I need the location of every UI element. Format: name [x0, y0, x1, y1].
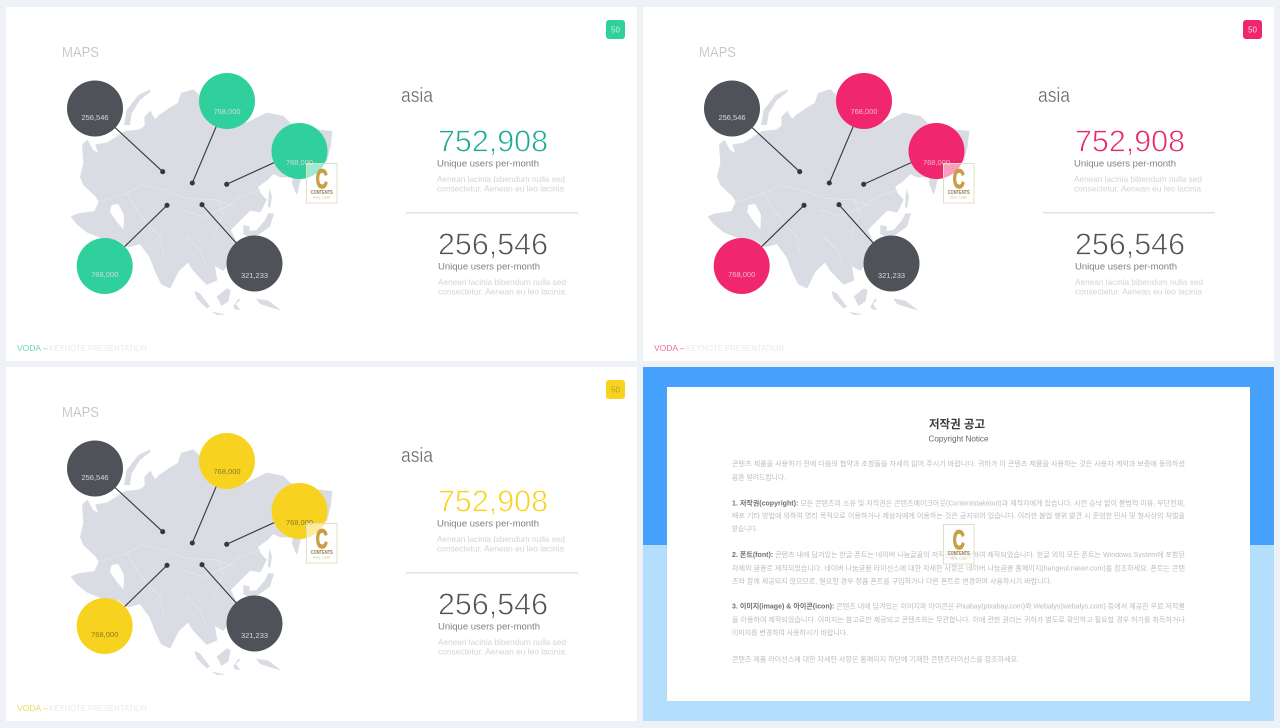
stat: 752,908: Unique users per-month [437, 519, 539, 530]
connector lines and dots [732, 101, 936, 266]
connector lines and dots [95, 461, 300, 626]
map of asia [72, 449, 332, 675]
stat: 752,908: Unique users per-month [1074, 159, 1176, 170]
stat: 256,546: consectetur. Aenean eu leo lacinia [438, 646, 565, 656]
circle: top 768,000: 768,000 [213, 107, 241, 116]
map of asia [72, 89, 332, 315]
circle: 321,233: 321,233 [878, 271, 905, 280]
circle: 256,546: 256,546 [718, 113, 746, 122]
region title: asia [401, 85, 434, 107]
stat: 752,908: consectetur. Aenean eu leo lacinia [437, 184, 564, 194]
stat: 256,546: Unique users per-month [438, 622, 540, 633]
circle: top 768,000: 768,000 [213, 467, 241, 476]
section 3: image and icon: 이미지를 변경하여 사용하시기 바랍니다. [732, 628, 848, 637]
circle: top 768,000 [199, 73, 255, 129]
notice intro: 콘텐츠 제품을 사용하기 전에 다음의 협약과 조항들을 자세히 읽어 주시기 바랍니다. 귀하가 이 콘텐츠 제품을 사용하는 것은 사용자 계약과 보증에 동의하셨 [732, 459, 1186, 468]
section 2: font: 자체의 글꼴로 제작되었습니다. 네이버 나눔글꼴 라이선스에 대한 자세한 사항은 네이버 나눔글꼴 홈페이지(hangeul.naver.com)를 참조하세요. 폰트는 콘텐 [732, 564, 1185, 572]
page badge [1243, 20, 1262, 39]
connector lines and dots [95, 101, 300, 266]
footer: VODA – [654, 343, 685, 353]
stat: 256,546: Aenean lacinia bibendum nulla sed [438, 277, 566, 287]
section 1: copyright: 1. 저작권(copyright): 모든 콘텐츠의 소유 및 저작권은 콘텐츠메이크아웃(Contentstakeout)과 제작자에게 있습니다. 사전 승낙 없이 불법적 이용, 무단전재, [732, 498, 1185, 508]
heading: maps: MAPS [62, 44, 99, 61]
stat: 752,908: consectetur. Aenean eu leo lacinia [437, 544, 564, 554]
circle: right 768,000 [272, 483, 328, 539]
section 1: copyright [732, 498, 1186, 533]
footer: KEYNOTE PRESENTATION [49, 703, 147, 713]
circle: bottom left 768,000: 768,000 [91, 270, 118, 279]
stat: 256,546 [438, 586, 566, 656]
section 1: copyright: 배포 기타 방법에 의하여 영리 목적으로 이용하거나 제삼자에게 이용하는 것은 금지되어 있습니다. 이러한 불법 행위 발견 시 준엄한 민사 및 형사상의 처벌을 [732, 511, 1186, 520]
stat: 752,908: 752,908 [438, 484, 548, 518]
stat: 752,908: consectetur. Aenean eu leo lacinia [1074, 184, 1201, 194]
stat: 256,546: consectetur. Aenean eu leo lacinia [438, 286, 565, 296]
stat: 256,546: Aenean lacinia bibendum nulla sed [1075, 277, 1203, 287]
section 3: image and icon [732, 602, 1186, 637]
circle: 321,233 [864, 236, 920, 292]
panel: maps yellow [6, 367, 637, 721]
circle: 256,546: 256,546 [81, 473, 109, 482]
watermark logo [306, 524, 337, 563]
stat: 752,908 [1074, 124, 1202, 194]
heading: maps: MAPS [62, 404, 99, 421]
region title: asia [401, 445, 434, 467]
stat: 256,546: 256,546 [438, 226, 548, 262]
circle: 256,546: 256,546 [81, 113, 109, 122]
closing note: 콘텐츠 제품 라이선스에 대한 자세한 사항은 홈페이지 하단에 기재한 콘텐츠라이선스를 참조하세요. [732, 654, 1019, 664]
section 2: font: 츠와 함께 제공되지 않으므로, 필요할 경우 정품 폰트를 구입하거나 다른 폰트로 변경하여 사용하시기 바랍니다. [732, 576, 1052, 586]
section 1: copyright: 받습니다. [732, 524, 758, 533]
circle: bottom left 768,000: 768,000 [91, 630, 118, 639]
section 3: image and icon: 을 이용하여 제작되었습니다. 이미지는 참고로만 제공되고 콘텐츠와는 무관합니다. 이에 관한 권리는 귀하가 별도로 확인하고 필요할 경우 허가를 취득하거나 [732, 615, 1186, 624]
stat: 256,546 [438, 226, 566, 296]
circle: bottom left 768,000 [77, 598, 133, 654]
page badge [606, 20, 625, 39]
stat: 752,908: Aenean lacinia bibendum nulla sed [437, 174, 565, 184]
circle: bottom left 768,000: 768,000 [728, 270, 755, 279]
page badge: 50 [611, 386, 620, 394]
notice subtitle: Copyright Notice [928, 434, 989, 444]
stat: 752,908: Aenean lacinia bibendum nulla sed [437, 534, 565, 544]
circle: top 768,000 [836, 73, 892, 129]
panel: copyright notice [643, 367, 1274, 721]
stat: 256,546: Unique users per-month [1075, 262, 1177, 273]
circle: top 768,000: 768,000 [850, 107, 878, 116]
circle: 321,233: 321,233 [241, 631, 268, 640]
footer: VODA – [17, 343, 48, 353]
circle: 321,233: 321,233 [241, 271, 268, 280]
footer: KEYNOTE PRESENTATION [49, 343, 147, 353]
stat: 256,546: 256,546 [438, 586, 548, 622]
stat: 752,908: Unique users per-month [437, 159, 539, 170]
watermark logo [944, 164, 974, 203]
circle: right 768,000 [908, 123, 964, 179]
stat: 752,908: 752,908 [1075, 124, 1185, 158]
stat: 752,908 [437, 484, 565, 554]
page badge: 50 [1248, 26, 1257, 34]
region title: asia [1038, 85, 1071, 107]
stat: 752,908: Aenean lacinia bibendum nulla sed [1074, 174, 1202, 184]
footer: KEYNOTE PRESENTATION [686, 343, 784, 353]
stat: 752,908 [437, 124, 565, 194]
map of asia [709, 89, 969, 315]
notice intro [732, 459, 1186, 482]
panel: maps pink [643, 7, 1274, 361]
circle: right 768,000 [272, 123, 328, 179]
circle: top 768,000 [199, 433, 255, 489]
watermark logo [306, 164, 337, 203]
circle: 256,546 [67, 440, 123, 496]
stat: 752,908: 752,908 [438, 124, 548, 158]
section 2: font [732, 550, 1185, 586]
stat: 256,546 [1075, 226, 1203, 296]
stat: 256,546: Unique users per-month [438, 262, 540, 273]
page badge [606, 380, 625, 399]
notice intro: 음을 알려드립니다. [732, 472, 786, 482]
stat: 256,546: consectetur. Aenean eu leo lacinia [1075, 286, 1202, 296]
heading: maps: MAPS [699, 44, 736, 61]
circle: 256,546 [67, 80, 123, 136]
circle: bottom left 768,000 [77, 238, 133, 294]
stat: 256,546: 256,546 [1075, 226, 1185, 262]
circle: 321,233 [226, 236, 282, 292]
circle: bottom left 768,000 [714, 238, 770, 294]
circle: right 768,000: 768,000 [286, 158, 313, 167]
panel: maps green [6, 7, 637, 361]
circle: 256,546 [704, 80, 760, 136]
section 2: font: 2. 폰트(font): 콘텐츠 내에 담겨있는 한글 폰트는 네이버 나눔글꼴의 저작권을 기증하여 제작되었습니다. 한글 외의 모든 폰트는 Windows System에 포함된 [732, 550, 1185, 559]
section 3: image and icon: 3. 이미지(image) & 아이콘(icon): 콘텐츠 내에 담겨있는 이미지와 아이콘은 Pixabay(pixabay.com)와 Webalys(webalys.com) 등에서 제공한 무료 저작물 [732, 602, 1186, 610]
page badge: 50 [611, 26, 620, 34]
notice title: 저작권 공고 [929, 417, 985, 431]
stat: 256,546: Aenean lacinia bibendum nulla sed [438, 637, 566, 647]
circle: right 768,000: 768,000 [286, 518, 313, 527]
circle: 321,233 [226, 596, 282, 652]
footer: VODA – [17, 703, 48, 713]
circle: right 768,000: 768,000 [923, 158, 950, 167]
watermark logo [944, 524, 974, 564]
